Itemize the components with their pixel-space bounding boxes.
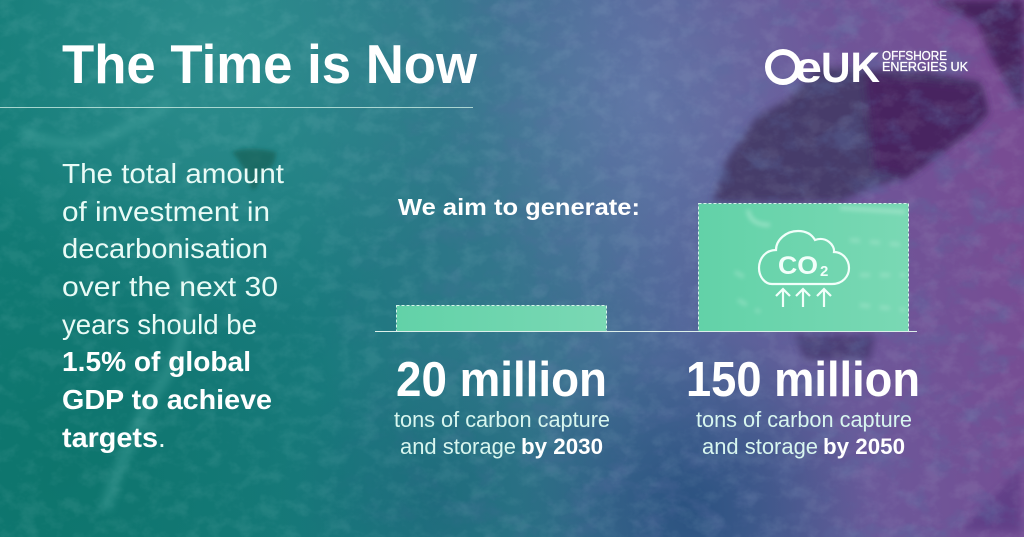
bar chart: carbon capture targets xyxy=(375,204,917,332)
stat: 150 million by 2050: by 2050 xyxy=(823,434,905,459)
stat: 150 million by 2050: and storage xyxy=(702,434,818,459)
stat: 20 million by 2030: tons of carbon capture xyxy=(394,407,610,432)
text block: investment statement: over the next 30 xyxy=(62,271,278,302)
stat: 20 million by 2030: and storage xyxy=(400,434,516,459)
icon: CO2 cloud with arrows: 2 xyxy=(820,263,828,280)
text block: investment statement: GDP to achieve xyxy=(62,384,272,415)
stat: 20 million by 2030 xyxy=(394,353,610,459)
stat: 150 million by 2050 xyxy=(686,353,920,459)
text block: investment statement: years should be xyxy=(62,309,257,340)
logo: OEUK Offshore Energies UK: OFFSHORE xyxy=(882,49,947,63)
icon: CO2 cloud with arrows: CO xyxy=(778,252,818,280)
stat: 150 million by 2050: 150 million xyxy=(686,353,920,407)
text block: investment statement: 1.5% of global xyxy=(62,346,251,377)
text block: investment statement: targets xyxy=(62,422,158,453)
logo: OEUK Offshore Energies UK: ENERGIES UK xyxy=(882,60,969,74)
bar: 2050 target xyxy=(698,204,908,332)
logo: OEUK Offshore Energies UK: e xyxy=(794,44,822,92)
text block: investment statement: . xyxy=(158,422,166,453)
icon: CO2 cloud with arrows xyxy=(759,231,849,307)
text block: investment statement: The total amount xyxy=(62,158,284,189)
title: The Time is Now xyxy=(62,33,477,95)
stat: 20 million by 2030: by 2030 xyxy=(521,434,603,459)
text block: investment statement: of investment in xyxy=(62,196,270,227)
stat: 20 million by 2030: 20 million xyxy=(396,353,607,407)
stat: 150 million by 2050: tons of carbon capture xyxy=(696,407,912,432)
bar: 2030 target xyxy=(396,306,606,332)
logo: OEUK Offshore Energies UK xyxy=(768,44,969,92)
logo: OEUK Offshore Energies UK: UK xyxy=(821,44,880,92)
heading: we aim to generate: We aim to generate: xyxy=(398,194,640,220)
text block: investment statement: decarbonisation xyxy=(62,233,268,264)
text block: investment statement xyxy=(62,158,284,453)
